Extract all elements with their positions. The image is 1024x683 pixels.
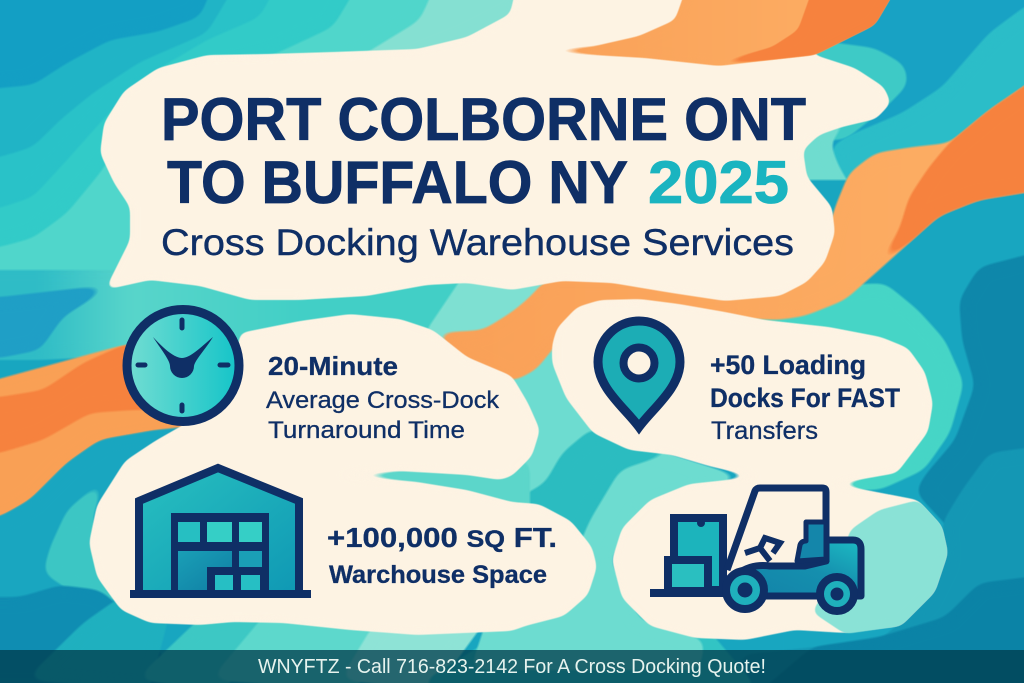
- text: turnaround stat: Turnaround Time: [268, 417, 465, 444]
- panel: clock stat blob: [89, 314, 597, 635]
- text: docks stat: Transfers: [711, 417, 818, 445]
- text: warehouse stat: Warchouse Space: [329, 561, 547, 589]
- title: [161, 86, 806, 216]
- icon: clock: [127, 310, 239, 422]
- orange left: [0, 345, 220, 535]
- right top: [800, 0, 1024, 260]
- panel: forklift blob tint: [812, 500, 948, 634]
- text: warehouse stat: +100,000 SQ FT.: [327, 522, 557, 553]
- lower left: [0, 430, 220, 680]
- title: 2025: [648, 149, 789, 216]
- panel: orange top wave: [525, 0, 925, 67]
- text: docks stat: +50 Loading: [710, 350, 866, 380]
- icon: location pin: [598, 321, 680, 427]
- text: turnaround stat: 20-Minute: [268, 351, 398, 381]
- orange main: [433, 45, 1024, 382]
- icon: forklift: [650, 488, 861, 611]
- subtitle: Cross Docking Warehouse Services: [161, 222, 794, 263]
- title: PORT COLBORNE ONT: [161, 86, 806, 153]
- middle: [470, 325, 745, 670]
- right lower: [780, 180, 1024, 683]
- footer bar: [0, 650, 1024, 683]
- footer bar: WNYFTZ - Call 716-823-2142 For A Cross Docking Quote!: [258, 656, 766, 678]
- text: docks stat: Docks For FAST: [710, 383, 900, 413]
- text: turnaround stat: Average Cross-Dock: [266, 387, 500, 414]
- panel: title blob: [100, 0, 891, 301]
- below title band: [0, 270, 560, 360]
- icon: warehouse: [130, 468, 311, 598]
- text: turnaround stat: [266, 351, 500, 444]
- panel: docks and forklift blob: [552, 299, 948, 640]
- title: TO BUFFALO NY: [167, 149, 628, 216]
- text: warehouse stat: [327, 522, 557, 589]
- text: docks stat: [710, 350, 900, 445]
